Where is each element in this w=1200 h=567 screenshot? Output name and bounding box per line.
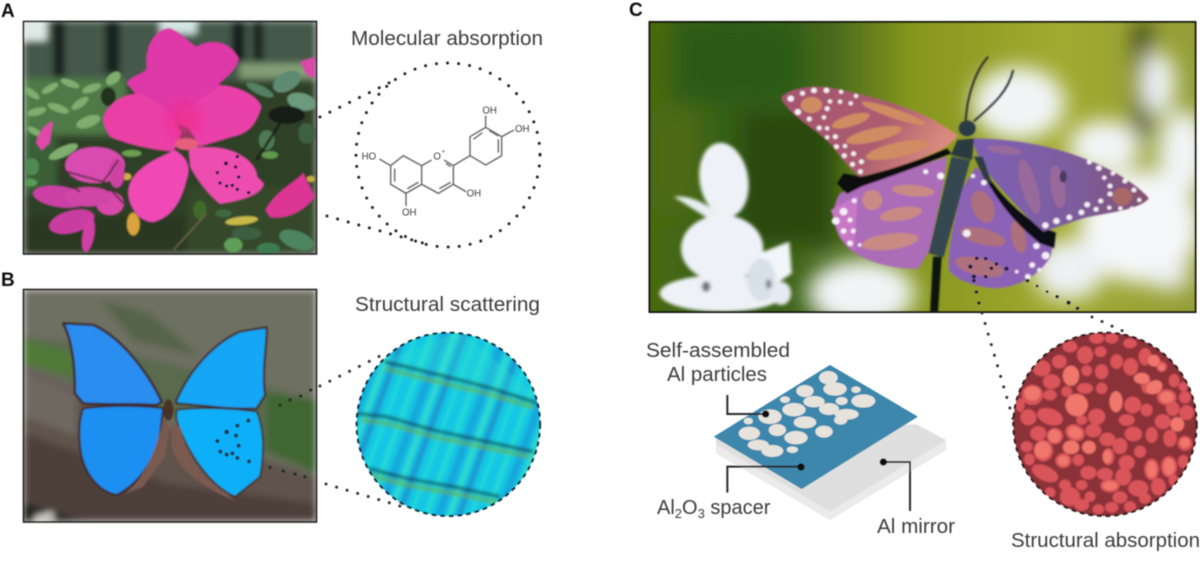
forest background (23, 21, 317, 255)
molecule circle: anthocyanin structure: OH (467, 189, 481, 200)
panel C: painted monarch butterfly photo (649, 22, 1200, 327)
molecule circle: anthocyanin structure (356, 63, 540, 247)
scale shading (387, 330, 540, 400)
panel label B: B (1, 270, 15, 291)
right hindwing (177, 408, 263, 497)
foliage (22, 66, 318, 255)
label: Al2O3 spacer: spacer (705, 497, 771, 519)
flower: buds (36, 121, 53, 151)
white wing dots (787, 88, 1141, 279)
Al mirror plate (716, 424, 946, 520)
self-assembled Al particles (739, 371, 875, 457)
right hind wing (949, 167, 1054, 288)
panel label A: A (1, 1, 15, 22)
leader lines (727, 395, 910, 511)
flower: main bloom (103, 28, 264, 222)
heading: Molecular absorption: Molecular absorption (351, 28, 543, 50)
label: Al2O3 spacer: O (682, 497, 698, 519)
panel B: blue morpho butterfly photo (23, 289, 317, 522)
label: Al2O3 spacer: Al (657, 497, 675, 519)
left hind wing (834, 157, 947, 269)
scale edges (357, 362, 538, 497)
label: Structural absorption: Structural absorption (1011, 530, 1200, 552)
panel A frame (24, 22, 316, 254)
molecule circle: anthocyanin structure: + (442, 149, 446, 155)
dotted wing marker (968, 257, 1079, 310)
panel B frame (24, 290, 316, 522)
label: Self-assembled Al particles (646, 340, 790, 386)
dotted wing marker (215, 419, 251, 463)
panel A: pink azalea photo (22, 21, 318, 255)
circle: wing scale micrograph (353, 330, 543, 520)
white flower (660, 140, 792, 312)
blurred garden background (649, 22, 1196, 312)
zoom callout lines A (320, 79, 430, 245)
butterfly (781, 57, 1149, 312)
wood background (23, 289, 317, 522)
left forewing (63, 323, 162, 405)
molecule circle: anthocyanin structure: OH (402, 208, 417, 219)
body (163, 399, 173, 421)
right fore wing (972, 138, 1149, 232)
molecule circle: anthocyanin structure: OH (515, 124, 530, 135)
label: Al2O3 spacer: 2 (675, 506, 682, 521)
circle: red particle micrograph (1013, 333, 1197, 516)
label: Self-assembled Al particles: Self-assembled (646, 340, 790, 362)
black wing gaps (837, 148, 951, 194)
panel label C: C (629, 0, 643, 21)
dotted petal marker (216, 155, 250, 194)
label: Self-assembled Al particles: Al particles (667, 364, 767, 386)
left fore wing (781, 87, 958, 177)
molecule circle: anthocyanin structure: O (433, 151, 441, 162)
Al2O3 spacer layer (715, 366, 917, 488)
left hindwing (79, 406, 163, 495)
right forewing (177, 327, 267, 409)
brighter particles (1024, 355, 1190, 490)
molecule circle: anthocyanin structure: HO (362, 151, 377, 162)
particle cells (1016, 334, 1193, 514)
body and antennae (929, 157, 970, 257)
molecule circle: anthocyanin structure: OH (482, 105, 497, 116)
heading: Structural scattering: Structural scattering (355, 294, 540, 316)
zoom callout lines B (320, 352, 400, 506)
zoom callout lines C (982, 313, 1125, 422)
label: Al2O3 spacer: 3 (698, 506, 705, 521)
flower: left bloom (31, 57, 315, 253)
panel C frame (650, 22, 1196, 312)
label: Al mirror: Al mirror (877, 516, 955, 538)
layer stack diagram (715, 366, 946, 520)
